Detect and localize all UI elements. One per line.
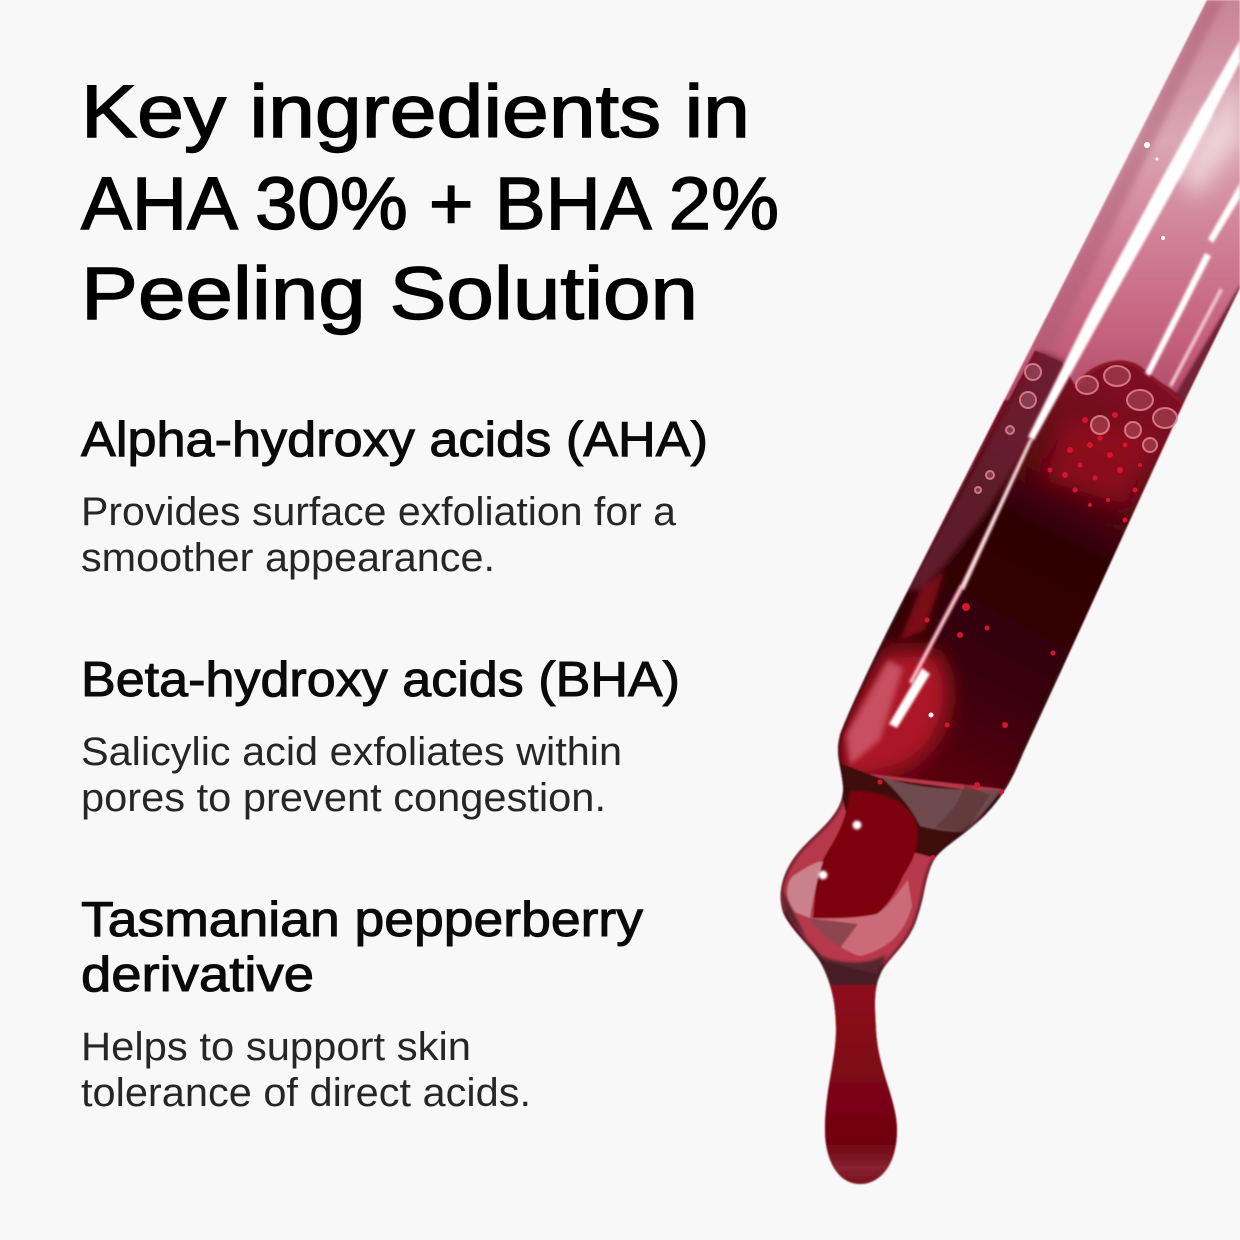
white halo at top (1180, 70, 1240, 200)
dark silhouette edge, lower tube and bulb (781, 600, 1060, 975)
ingredient: tasmanian pepperberry derivative: tolerance of direct acids. (81, 1071, 531, 1115)
red specks (878, 412, 1142, 859)
bubbles (975, 364, 1177, 493)
dark bottom rim of bulb (782, 890, 885, 990)
ingredient: tasmanian pepperberry derivative: derivative (81, 948, 314, 1002)
ingredient: alpha-hydroxy acids (81, 413, 708, 580)
bulb base (775, 770, 1010, 975)
ingredient: alpha-hydroxy acids: smoother appearance. (81, 536, 495, 580)
glass edge shading (1030, 0, 1224, 350)
band rim of bubbles (1075, 362, 1185, 405)
title: Peeling Solution (81, 252, 698, 335)
neck shadow (836, 762, 1005, 858)
ingredient: tasmanian pepperberry derivative: Tasmanian pepperberry (81, 893, 644, 947)
ingredient: beta-hydroxy acids (81, 653, 680, 820)
dark liquid column (830, 350, 1195, 800)
bulb pale lens left (787, 862, 823, 918)
illustration: dropper with red serum (770, 0, 1240, 1200)
bulb pink lower lens (810, 880, 912, 956)
bulb dark red core (813, 791, 918, 918)
ingredient: beta-hydroxy acids: Salicylic acid exfoliates within (81, 730, 622, 774)
ingredient: alpha-hydroxy acids: Provides surface exfoliation for a (81, 490, 677, 534)
red lower bulb glow (842, 650, 949, 785)
title: AHA 30% + BHA 2% (81, 162, 779, 245)
ingredient: beta-hydroxy acids: pores to prevent congestion. (81, 776, 606, 820)
ingredient: tasmanian pepperberry derivative (81, 893, 644, 1115)
title: Key ingredients in (81, 70, 750, 153)
title (81, 70, 779, 335)
ingredient: tasmanian pepperberry derivative: Helps to support skin (81, 1025, 471, 1069)
glass highlights (889, 40, 1240, 728)
hanging drop (825, 985, 897, 1184)
red bubble haze (1045, 420, 1160, 505)
grey glass triangle at tube tip (880, 776, 1002, 832)
white glints (818, 142, 1165, 880)
ingredient: alpha-hydroxy acids: Alpha-hydroxy acids (AHA) (81, 413, 708, 467)
ingredient: beta-hydroxy acids: Beta-hydroxy acids (BHA) (81, 653, 680, 707)
